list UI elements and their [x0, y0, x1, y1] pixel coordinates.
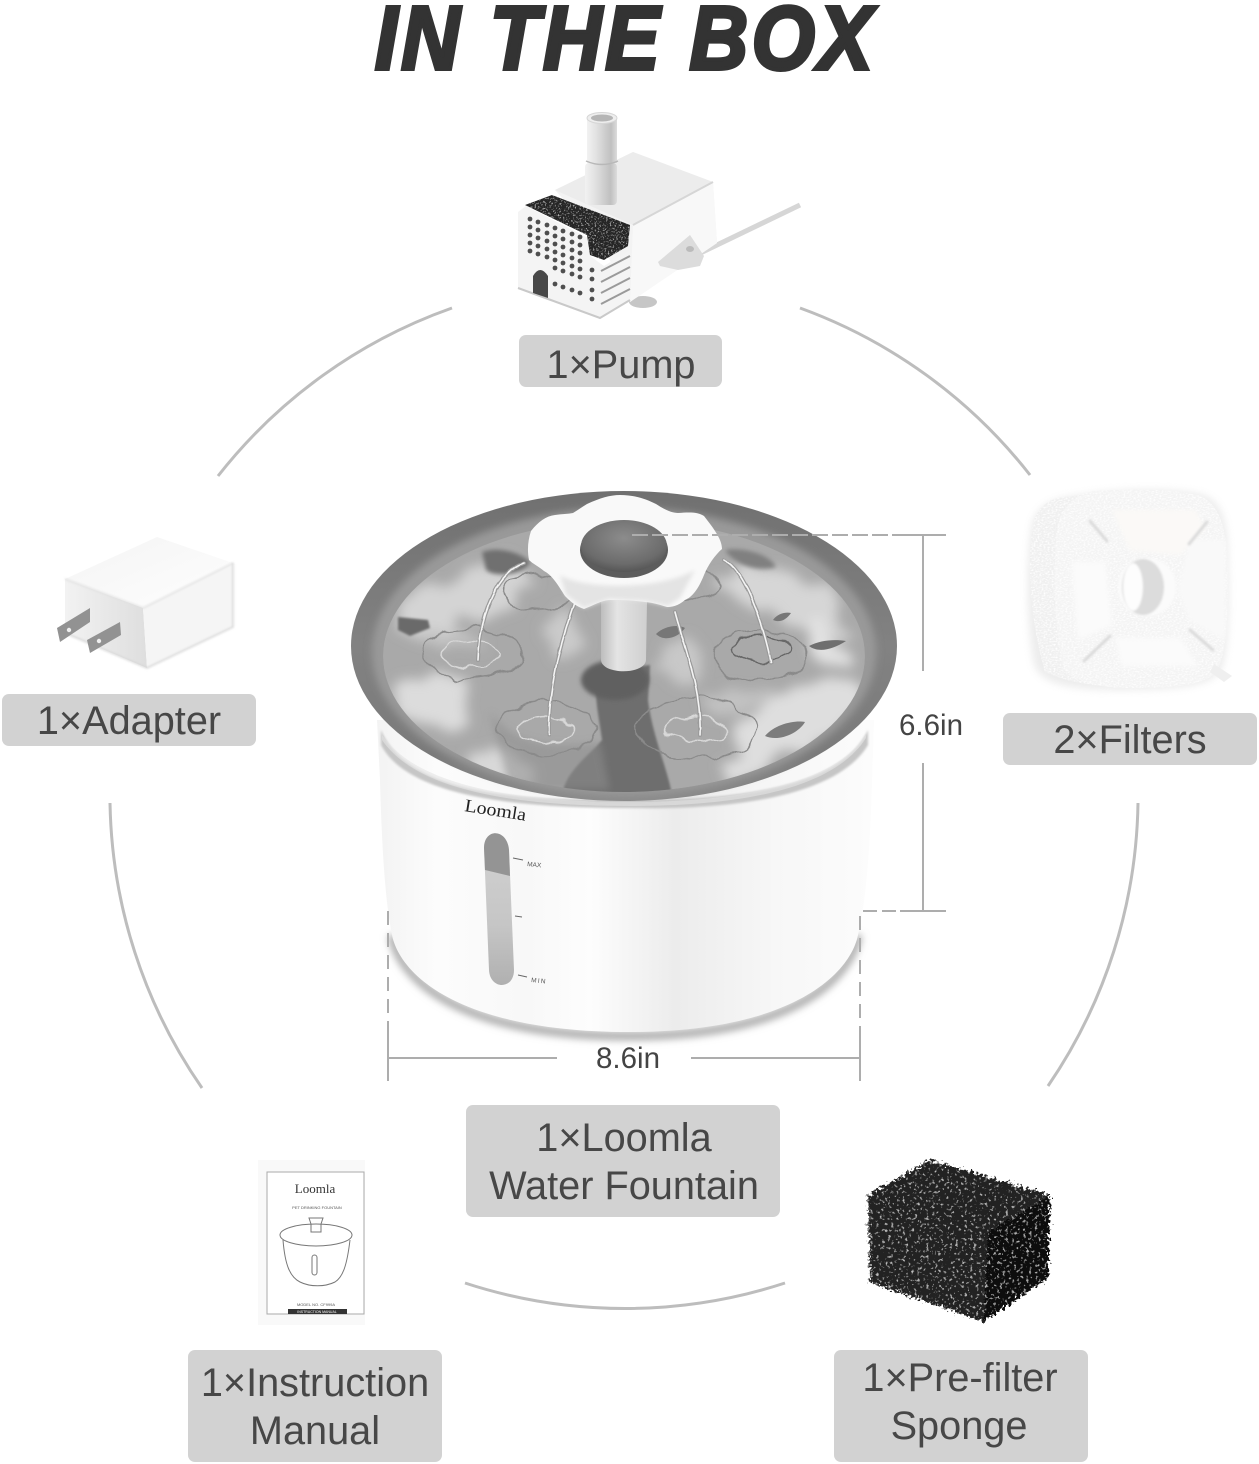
label: instruction manual: Manual: [250, 1409, 380, 1453]
label: water fountain: Water Fountain: [489, 1164, 759, 1208]
dimension: height 6.6in: 6.6in: [899, 709, 963, 742]
white flower cap: [528, 495, 722, 609]
connecting ring arcs: [110, 308, 1138, 1308]
label: instruction manual: [188, 1350, 442, 1462]
ripple rings: [422, 572, 810, 759]
icon: instruction manual: Loomla: [295, 1181, 335, 1196]
dimension: width 8.6in: 8.6in: [596, 1042, 660, 1075]
label: water fountain: [466, 1105, 780, 1217]
icon: adapter: [57, 537, 233, 668]
label: pre-filter sponge: 1×Pre-filter: [862, 1356, 1058, 1400]
label: filters: [1003, 713, 1257, 765]
icon: instruction manual: [258, 1160, 365, 1325]
icon: pre-filter sponge: [868, 1160, 1050, 1322]
label: instruction manual: 1×Instruction: [201, 1361, 429, 1405]
icon: instruction manual: PET DRINKING FOUNTAIN: [292, 1205, 342, 1210]
dimension: width 8.6in: [388, 911, 860, 1081]
label: adapter: [2, 694, 256, 746]
water streams: [478, 560, 771, 735]
label: water fountain: 1×Loomla: [536, 1116, 713, 1160]
water level window: MIN: [531, 977, 547, 986]
label: pre-filter sponge: [834, 1350, 1088, 1462]
bowl rim: [351, 491, 897, 801]
water level window: MAX: [527, 861, 542, 870]
dimension: height 6.6in: [632, 535, 963, 911]
label: pump: [519, 335, 722, 387]
fountain stem: [601, 600, 647, 671]
cap button: [580, 522, 668, 578]
centre dark channel: [562, 665, 672, 795]
label: adapter: 1×Adapter: [37, 699, 221, 743]
label: pre-filter sponge: Sponge: [891, 1404, 1027, 1448]
icon: instruction manual: MODEL NO. CF999A: [297, 1302, 335, 1307]
translucent band under rim: [381, 730, 868, 808]
icon: filters: [1028, 490, 1232, 690]
fountain illustration: [351, 491, 897, 1036]
icon: instruction manual: INSTRUCTION MANUAL: [297, 1310, 337, 1314]
label: pump: 1×Pump: [547, 343, 695, 387]
water surface: [383, 520, 865, 795]
fountain body: [377, 720, 874, 1032]
icon: pump: [518, 112, 800, 318]
label: filters: 2×Filters: [1053, 718, 1207, 762]
brand name: Loomla: [463, 795, 528, 825]
water level window: [484, 833, 547, 986]
